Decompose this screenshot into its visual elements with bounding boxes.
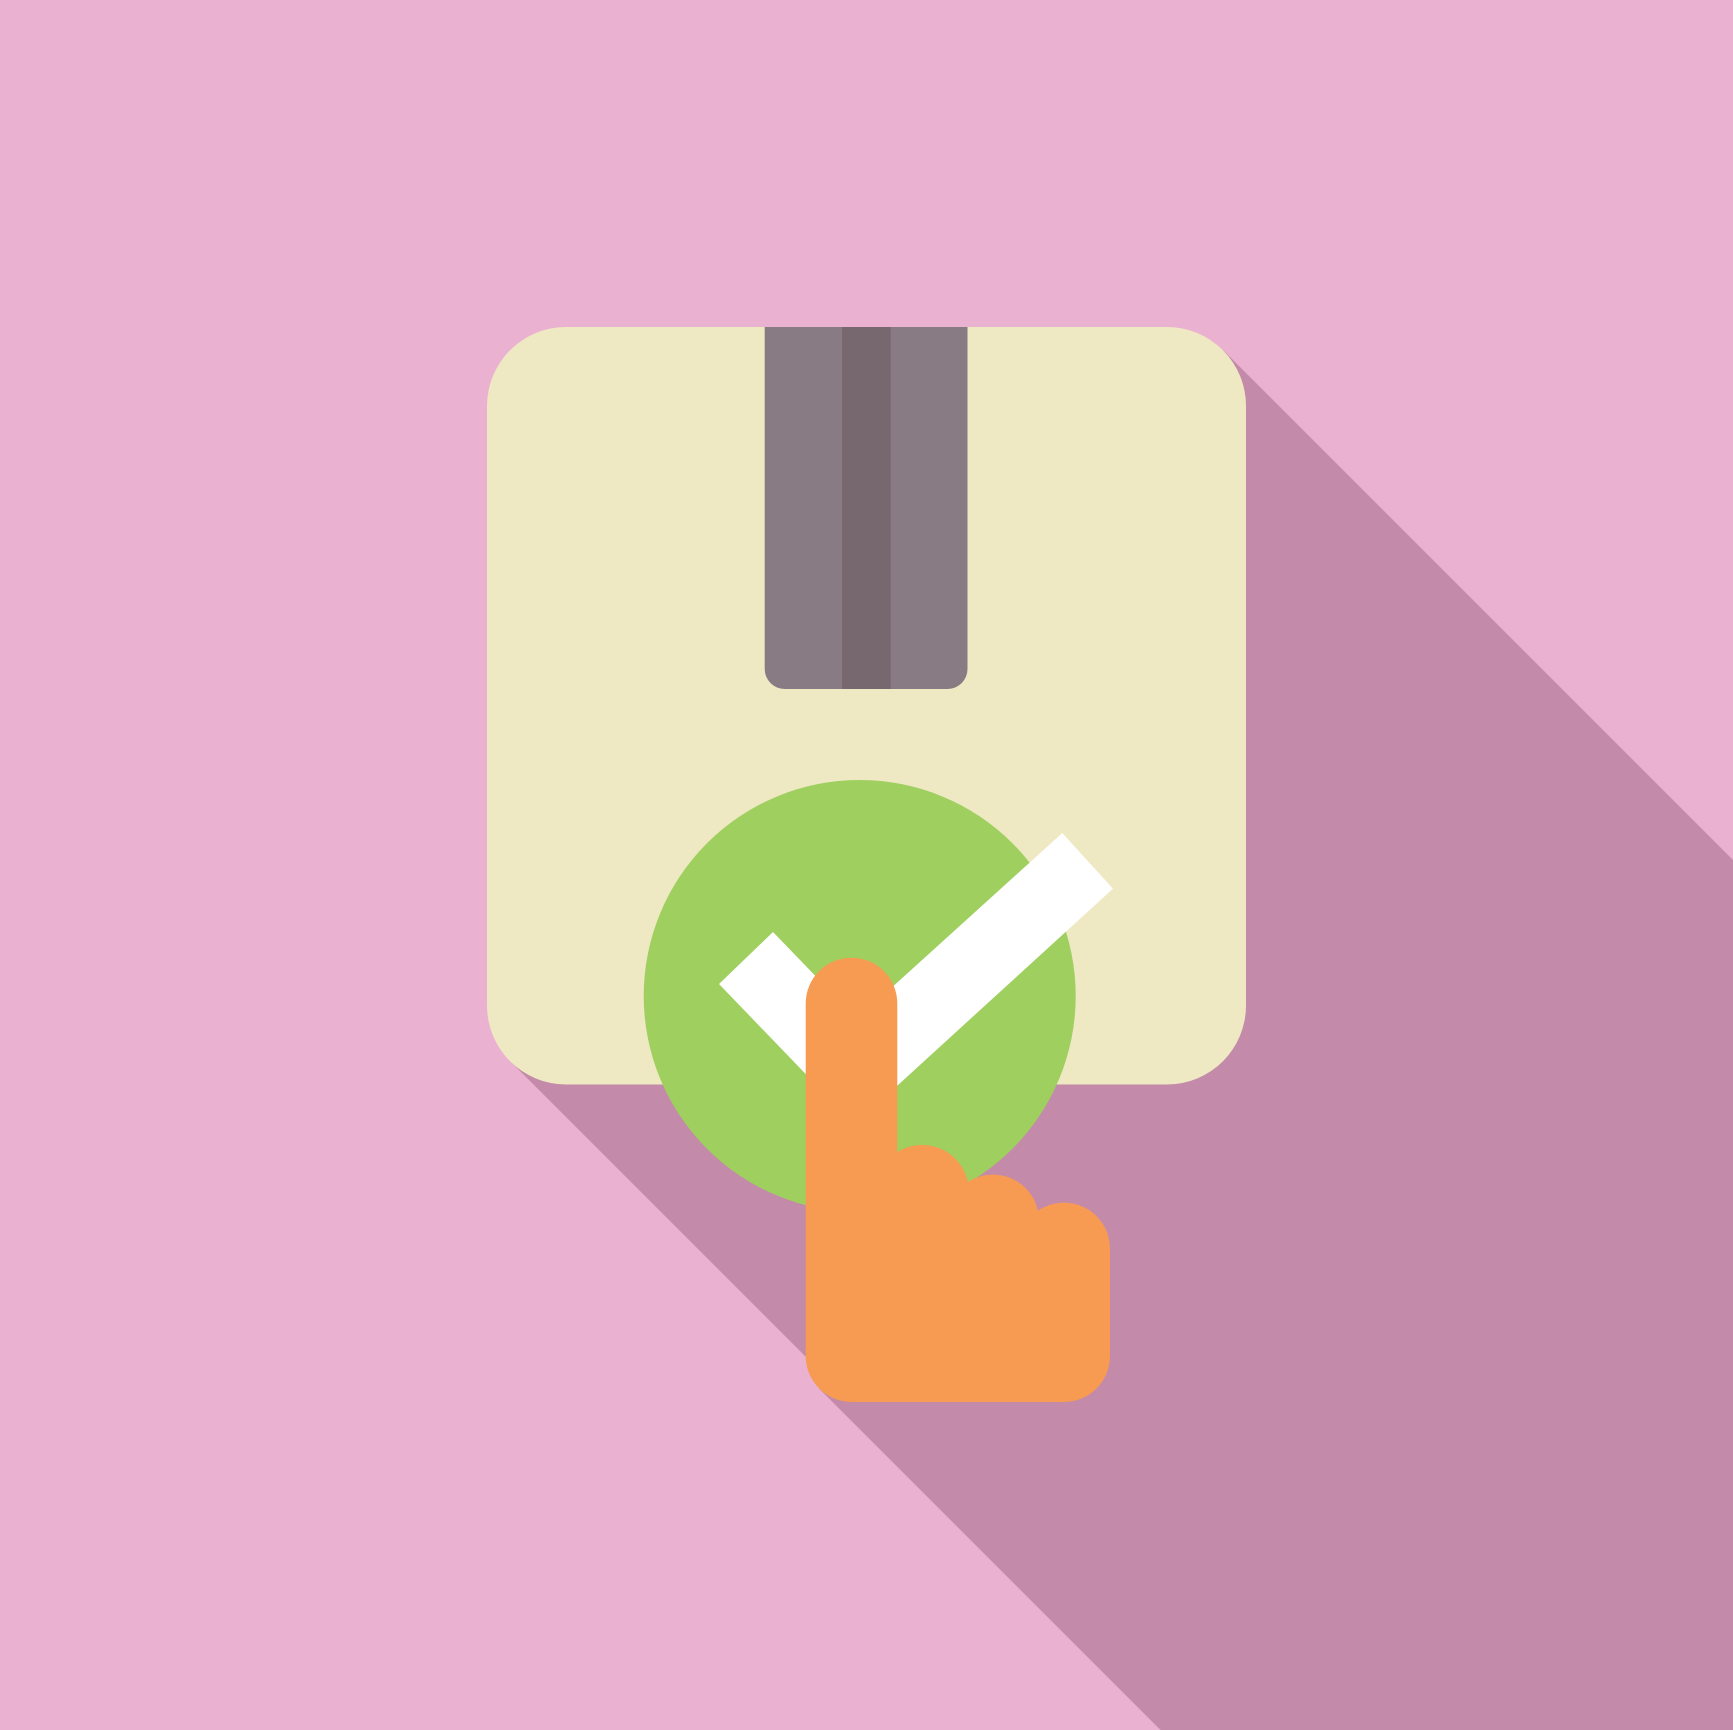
long diagonal shadow	[510, 350, 1733, 1730]
icon: green circle	[644, 780, 1076, 1212]
icon: pointing hand	[806, 958, 1110, 1402]
icon: white check mark	[719, 833, 1113, 1125]
tape flap	[765, 327, 968, 689]
package tape	[765, 327, 968, 689]
panel: package box	[487, 327, 1246, 1084]
tape centre stripe	[842, 327, 891, 689]
